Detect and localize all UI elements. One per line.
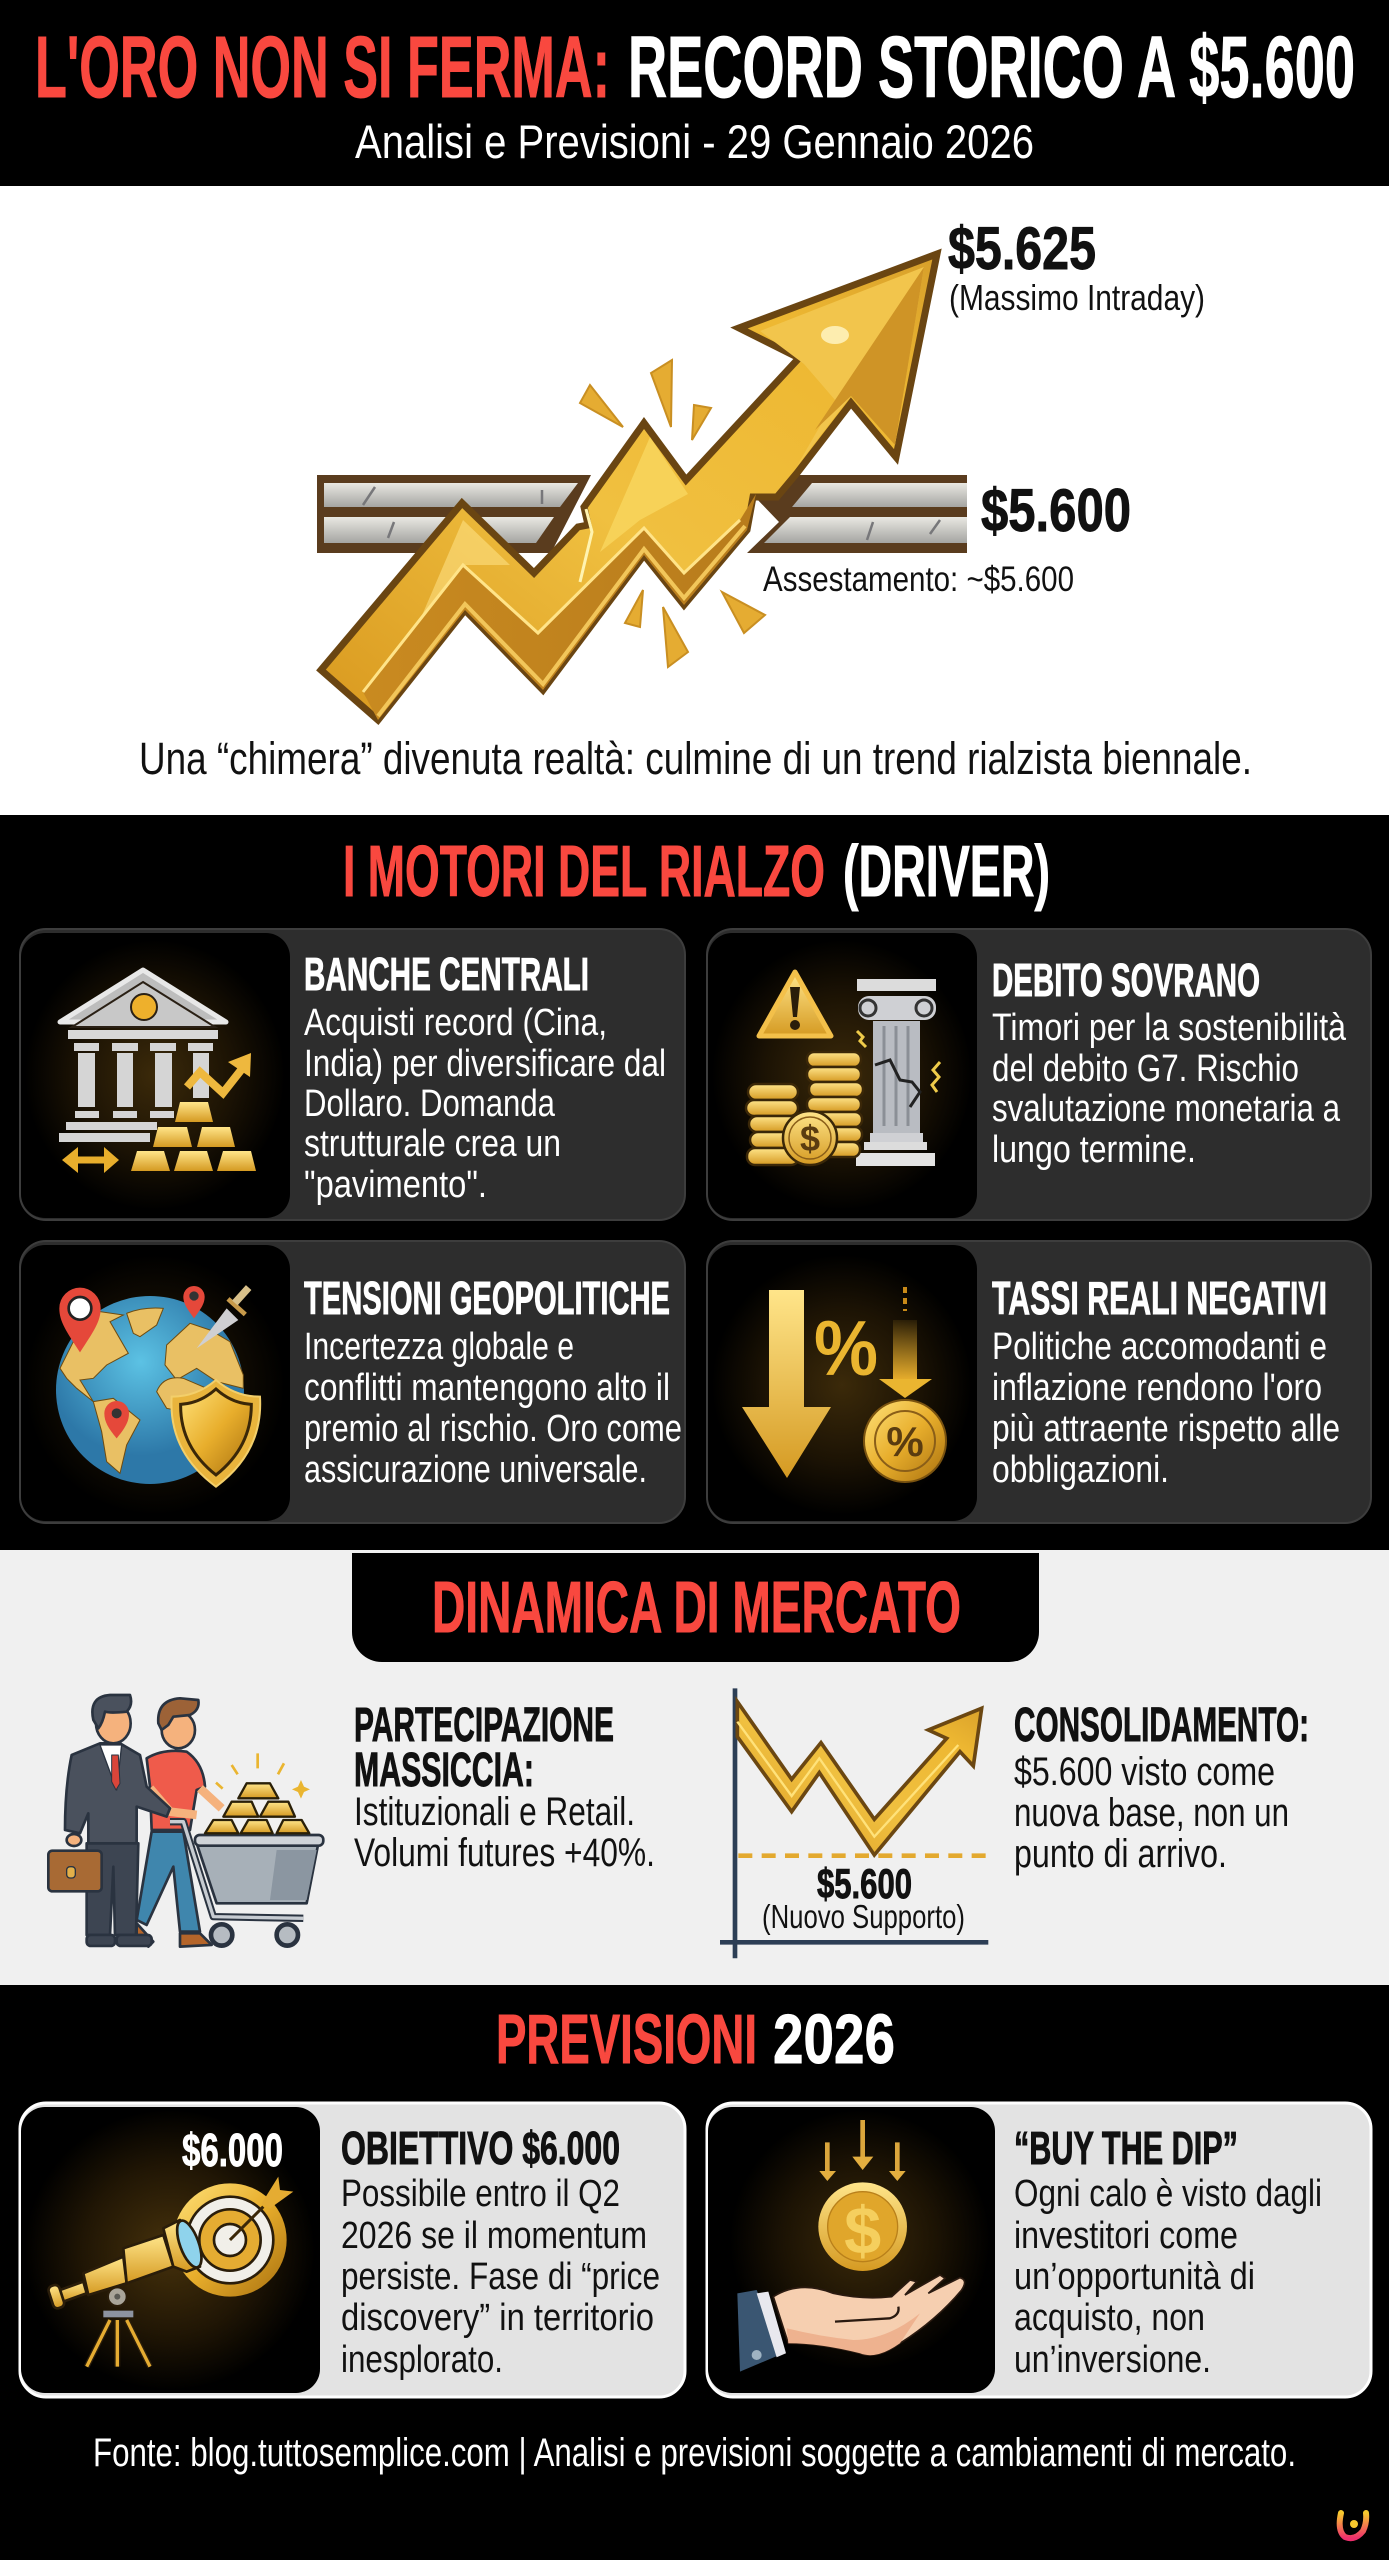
card body: conflitti mantengono alto il [304, 1367, 670, 1409]
text: consolidamento: $5.600 visto come [1014, 1750, 1275, 1794]
price label: intraday high: (Massimo Intraday) [949, 277, 1205, 318]
card body: acquisto, non [1014, 2297, 1205, 2339]
card body: Ogni calo è visto dagli [1014, 2173, 1322, 2215]
young investor [137, 1698, 222, 1947]
text: partecipazione massiccia: PARTECIPAZIONE [354, 1699, 614, 1752]
text: partecipazione massiccia: MASSICCIA: [354, 1744, 534, 1797]
price label: intraday high [948, 215, 1205, 318]
card body: Dollaro. Domanda [304, 1083, 556, 1125]
icon: coin falling on open hand: $ [844, 2194, 881, 2268]
panel: tensioni geopolitiche [20, 1241, 685, 1523]
heading: previsioni: PREVISIONI [496, 2000, 757, 2078]
icon: falling arrows and percent coin: % [886, 1418, 924, 1465]
chart: new support at $5.600 [720, 1688, 988, 1958]
price label: barrier: $5.600 [981, 477, 1131, 544]
icon: falling arrows and percent coin [742, 1287, 946, 1482]
panel: buy the dip [707, 2103, 1371, 2397]
card body: del debito G7. Rischio [992, 1048, 1299, 1090]
text: partecipazione massiccia: Volumi futures +40%. [354, 1831, 655, 1875]
heading: previsioni: 2026 [773, 2000, 895, 2078]
card body: obbligazioni. [992, 1449, 1169, 1491]
heading tab: dinamica di mercato: DINAMICA DI MERCATO [432, 1568, 961, 1648]
card body: inflazione rendono l'oro [992, 1367, 1322, 1409]
card body: 2026 se il momentum [341, 2215, 647, 2257]
gold bars [205, 1783, 309, 1833]
card body [304, 1326, 682, 1491]
text: consolidamento [1014, 1699, 1309, 1876]
card body: premio al rischio. Oro come [304, 1408, 682, 1450]
card body: India) per diversificare dal [304, 1043, 666, 1085]
card body: Politiche accomodanti e [992, 1326, 1327, 1368]
chart: new support at $5.600: (Nuovo Supporto) [762, 1898, 965, 1935]
text: consolidamento: punto di arrivo. [1014, 1832, 1227, 1876]
card body: inesplorato. [341, 2339, 503, 2381]
icon: gold shards [580, 360, 765, 667]
panel: obiettivo 6000 [20, 2103, 685, 2397]
settlement note: Assestamento: ~$5.600 [763, 560, 1074, 599]
icon: logo [1340, 2513, 1366, 2538]
icon: bank with gold bars [59, 970, 256, 1173]
price label: intraday high: $5.625 [948, 215, 1096, 282]
card body: Acquisti record (Cina, [304, 1002, 607, 1044]
card body [1014, 2173, 1322, 2381]
heading tab: dinamica di mercato [352, 1553, 1039, 1662]
icon: falling arrows and percent coin: % [814, 1304, 878, 1392]
icon label: 6000: $6.000 [182, 2124, 283, 2176]
subtitle: Analisi e Previsioni - 29 Gennaio 2026 [355, 115, 1034, 168]
text: partecipazione massiccia: Istituzionali e Retail. [354, 1790, 635, 1834]
card body: discovery” in territorio [341, 2297, 654, 2339]
card body [341, 2173, 660, 2381]
card body: un’inversione. [1014, 2339, 1211, 2381]
panel: banche centrali [20, 929, 685, 1220]
card body: Incertezza globale e [304, 1326, 574, 1368]
card title: OBIETTIVO $6.000 [341, 2122, 620, 2174]
card title: “BUY THE DIP” [1014, 2122, 1238, 2174]
heading: drivers: I MOTORI DEL RIALZO [343, 832, 825, 912]
icon: investors with gold cart [48, 1695, 323, 1947]
card body [304, 1002, 666, 1206]
card body: "pavimento". [304, 1164, 487, 1206]
card body [992, 1007, 1347, 1171]
icon: telescope and target [47, 2177, 293, 2367]
icon: coin falling on open hand [737, 2120, 965, 2372]
icon: golden rising arrow [321, 254, 937, 720]
card body [992, 1326, 1340, 1491]
card body: Possibile entro il Q2 [341, 2173, 620, 2215]
icon: broken barrier bars [317, 475, 967, 553]
card body: lungo termine. [992, 1129, 1196, 1171]
heading: drivers: (DRIVER) [843, 832, 1050, 912]
title: L'ORO NON SI FERMA: [35, 19, 610, 116]
card title: TENSIONI GEOPOLITICHE [304, 1272, 670, 1324]
card body: strutturale crea un [304, 1123, 561, 1165]
icon: globe, pins, dagger and shield [56, 1285, 260, 1487]
card body: un’opportunità di [1014, 2256, 1255, 2298]
panel: tassi reali negativi [707, 1241, 1371, 1523]
card title: BANCHE CENTRALI [304, 948, 589, 1000]
panel: debito sovrano [707, 929, 1371, 1220]
card body: persiste. Fase di “price [341, 2256, 660, 2298]
icon: warning, coins and cracked column [746, 972, 940, 1166]
card body: investitori come [1014, 2215, 1238, 2257]
text: partecipazione massiccia [354, 1699, 655, 1875]
card body: assicurazione universale. [304, 1449, 647, 1491]
chart: new support at $5.600: $5.600 [817, 1860, 912, 1907]
icon: warning, coins and cracked column: $ [800, 1118, 820, 1159]
businessman [48, 1695, 170, 1946]
text: consolidamento: nuova base, non un [1014, 1791, 1289, 1835]
hero panel: arrow breaking the $5.600 barrier [317, 254, 967, 720]
shopping cart [170, 1822, 323, 1946]
